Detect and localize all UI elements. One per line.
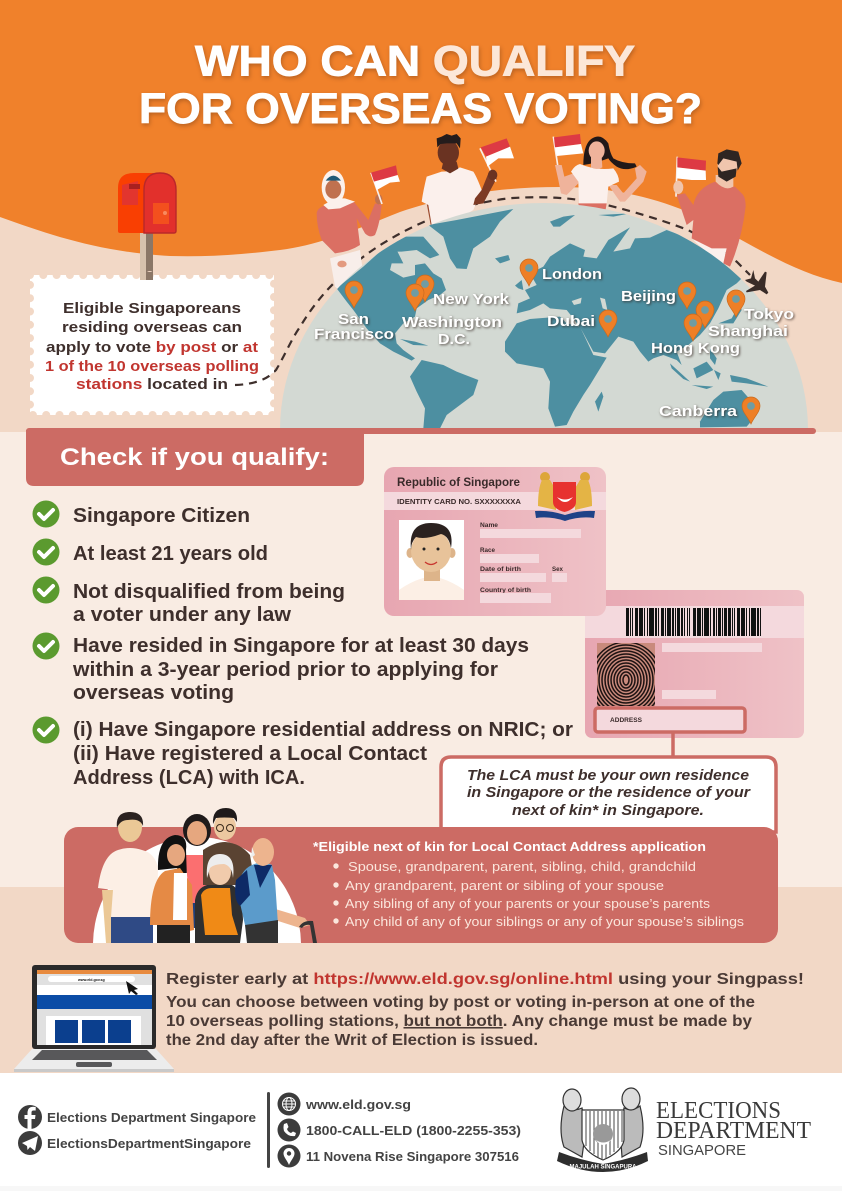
- footer: social media: Elections Department Singapore: [47, 1110, 256, 1125]
- checklist: Address (LCA) with ICA.: [73, 767, 305, 789]
- illustration: family group: [93, 808, 317, 943]
- identity card front: Sex: [552, 566, 563, 573]
- person: bearded man with flag: [673, 149, 746, 267]
- identity card front: Race: [480, 547, 495, 554]
- panel: eligible next of kin: *Eligible next of kin for Local Contact Address application: [313, 839, 706, 854]
- logo: Elections Department wordmark: ELECTIONS: [656, 1098, 781, 1124]
- checklist: Have resided in Singapore for at least 30 days: [73, 635, 529, 657]
- logo: crest: [557, 1088, 648, 1172]
- polling station city labels: Canberra: [659, 403, 738, 420]
- stamp panel: intro text: 1 of the 10 overseas polling: [45, 358, 259, 375]
- checklist: [32, 500, 573, 789]
- identity card front: Date of birth: [480, 566, 521, 573]
- registration text: 10 overseas polling stations, but not both . Any change must be made by: [166, 1013, 752, 1030]
- logo: Elections Department wordmark: SINGAPORE: [658, 1142, 746, 1159]
- icon: red mailbox on post: [118, 173, 176, 282]
- checklist: (i) Have Singapore residential address on NRIC; or: [73, 719, 573, 741]
- connector line to callout: [671, 732, 675, 757]
- callout: LCA definition: [441, 757, 776, 832]
- icon: Singapore coat of arms: [535, 472, 595, 521]
- polling station city labels: Francisco: [314, 326, 394, 343]
- callout: LCA definition: next of kin* in Singapore.: [512, 803, 704, 819]
- world globe map: [280, 203, 808, 431]
- polling station city labels: London: [542, 266, 602, 283]
- footer: social media: [18, 1105, 256, 1155]
- checklist: a voter under any law: [73, 604, 291, 626]
- polling station location pins: [345, 259, 760, 424]
- registration text: the 2nd day after the Writ of Election is issued.: [166, 1032, 538, 1049]
- polling station city labels: Beijing: [621, 288, 676, 305]
- footer: social media: ElectionsDepartmentSingapore: [47, 1136, 251, 1151]
- footer: contact details: 1800-CALL-ELD (1800-2255-353): [306, 1123, 521, 1138]
- polling station city labels: Hong Kong: [651, 340, 740, 357]
- polling station city labels: Dubai: [547, 313, 595, 330]
- callout: LCA definition: The LCA must be your own residence: [467, 768, 749, 784]
- heading: check if you qualify: [26, 430, 364, 486]
- polling station city labels: Washington: [402, 314, 502, 331]
- stamp panel: intro text: Eligible Singaporeans: [63, 300, 241, 317]
- polling station city labels: Tokyo: [744, 306, 794, 323]
- checklist: within a 3-year period prior to applying for: [72, 659, 498, 681]
- polling station city labels: Shanghai: [708, 323, 788, 340]
- stamp panel: intro text: residing overseas can: [62, 319, 242, 336]
- stamp panel: intro text: [30, 272, 274, 415]
- panel: eligible next of kin: Any grandparent, parent or sibling of your spouse: [345, 879, 664, 893]
- callout: LCA definition: in Singapore or the residence of your: [467, 785, 751, 801]
- panel: eligible next of kin: [64, 808, 778, 943]
- checklist: At least 21 years old: [73, 543, 268, 565]
- footer: contact details: 11 Novena Rise Singapore 307516: [306, 1149, 519, 1164]
- checklist: overseas voting: [73, 682, 234, 704]
- stamp panel: intro text: apply to vote by post or at: [46, 339, 258, 356]
- stamp panel: intro text: stations located in: [76, 376, 228, 393]
- title: [139, 38, 702, 133]
- checklist: Not disqualified from being: [73, 581, 345, 603]
- heading: check if you qualify: Check if you qualify:: [60, 444, 329, 471]
- person: woman in hijab with flag: [317, 165, 400, 293]
- polling station city labels: New York: [433, 291, 510, 308]
- registration text: [166, 971, 804, 1049]
- polling station city labels: D.C.: [438, 331, 470, 348]
- panel: eligible next of kin: Any sibling of any of your parents or your spouse’s parents: [345, 897, 710, 911]
- identity card front: Republic of Singapore: [397, 477, 520, 489]
- footer: contact details: [278, 1092, 521, 1168]
- polling station city labels: [314, 266, 794, 420]
- footer: contact details: www.eld.gov.sg: [305, 1097, 411, 1112]
- checklist: (ii) Have registered a Local Contact: [73, 743, 427, 765]
- dashed flight path: [235, 197, 750, 385]
- panel: eligible next of kin: Spouse, grandparent, parent, sibling, child, grandchild: [348, 860, 696, 874]
- icon: laptop with website: www.eld.gov.sg: [77, 978, 105, 982]
- checklist: Singapore Citizen: [73, 505, 250, 527]
- logo: Elections Department wordmark: DEPARTMENT: [656, 1118, 811, 1144]
- icon: airplane: [745, 270, 768, 294]
- footer divider: [267, 1092, 270, 1168]
- person: woman with braid with flag: [553, 134, 647, 209]
- identity card front: [384, 467, 606, 616]
- identity card back: ADDRESS: [610, 717, 643, 724]
- logo: crest: MAJULAH SINGAPURA: [569, 1164, 637, 1170]
- identity card front: Country of birth: [480, 587, 531, 594]
- person: man in white t-shirt with flag: [422, 134, 514, 225]
- identity card front: Name: [480, 522, 498, 529]
- registration text: You can choose between voting by post or voting in-person at one of the: [166, 994, 755, 1011]
- panel: eligible next of kin: Any child of any of your siblings or any of your spouse’s siblings: [345, 915, 744, 929]
- polling station city labels: San: [338, 311, 369, 328]
- identity card back: [585, 590, 804, 738]
- icon: laptop with website: [14, 965, 174, 1072]
- title: FOR OVERSEAS VOTING?: [139, 85, 702, 133]
- title: WHO CAN QUALIFY: [195, 38, 635, 86]
- identity card front: IDENTITY CARD NO. SXXXXXXXA: [397, 499, 521, 506]
- divider bar: [26, 428, 816, 434]
- logo: Elections Department wordmark: [656, 1098, 811, 1159]
- registration text: Register early at https://www.eld.gov.sg/online.html using your Singpass!: [166, 971, 804, 988]
